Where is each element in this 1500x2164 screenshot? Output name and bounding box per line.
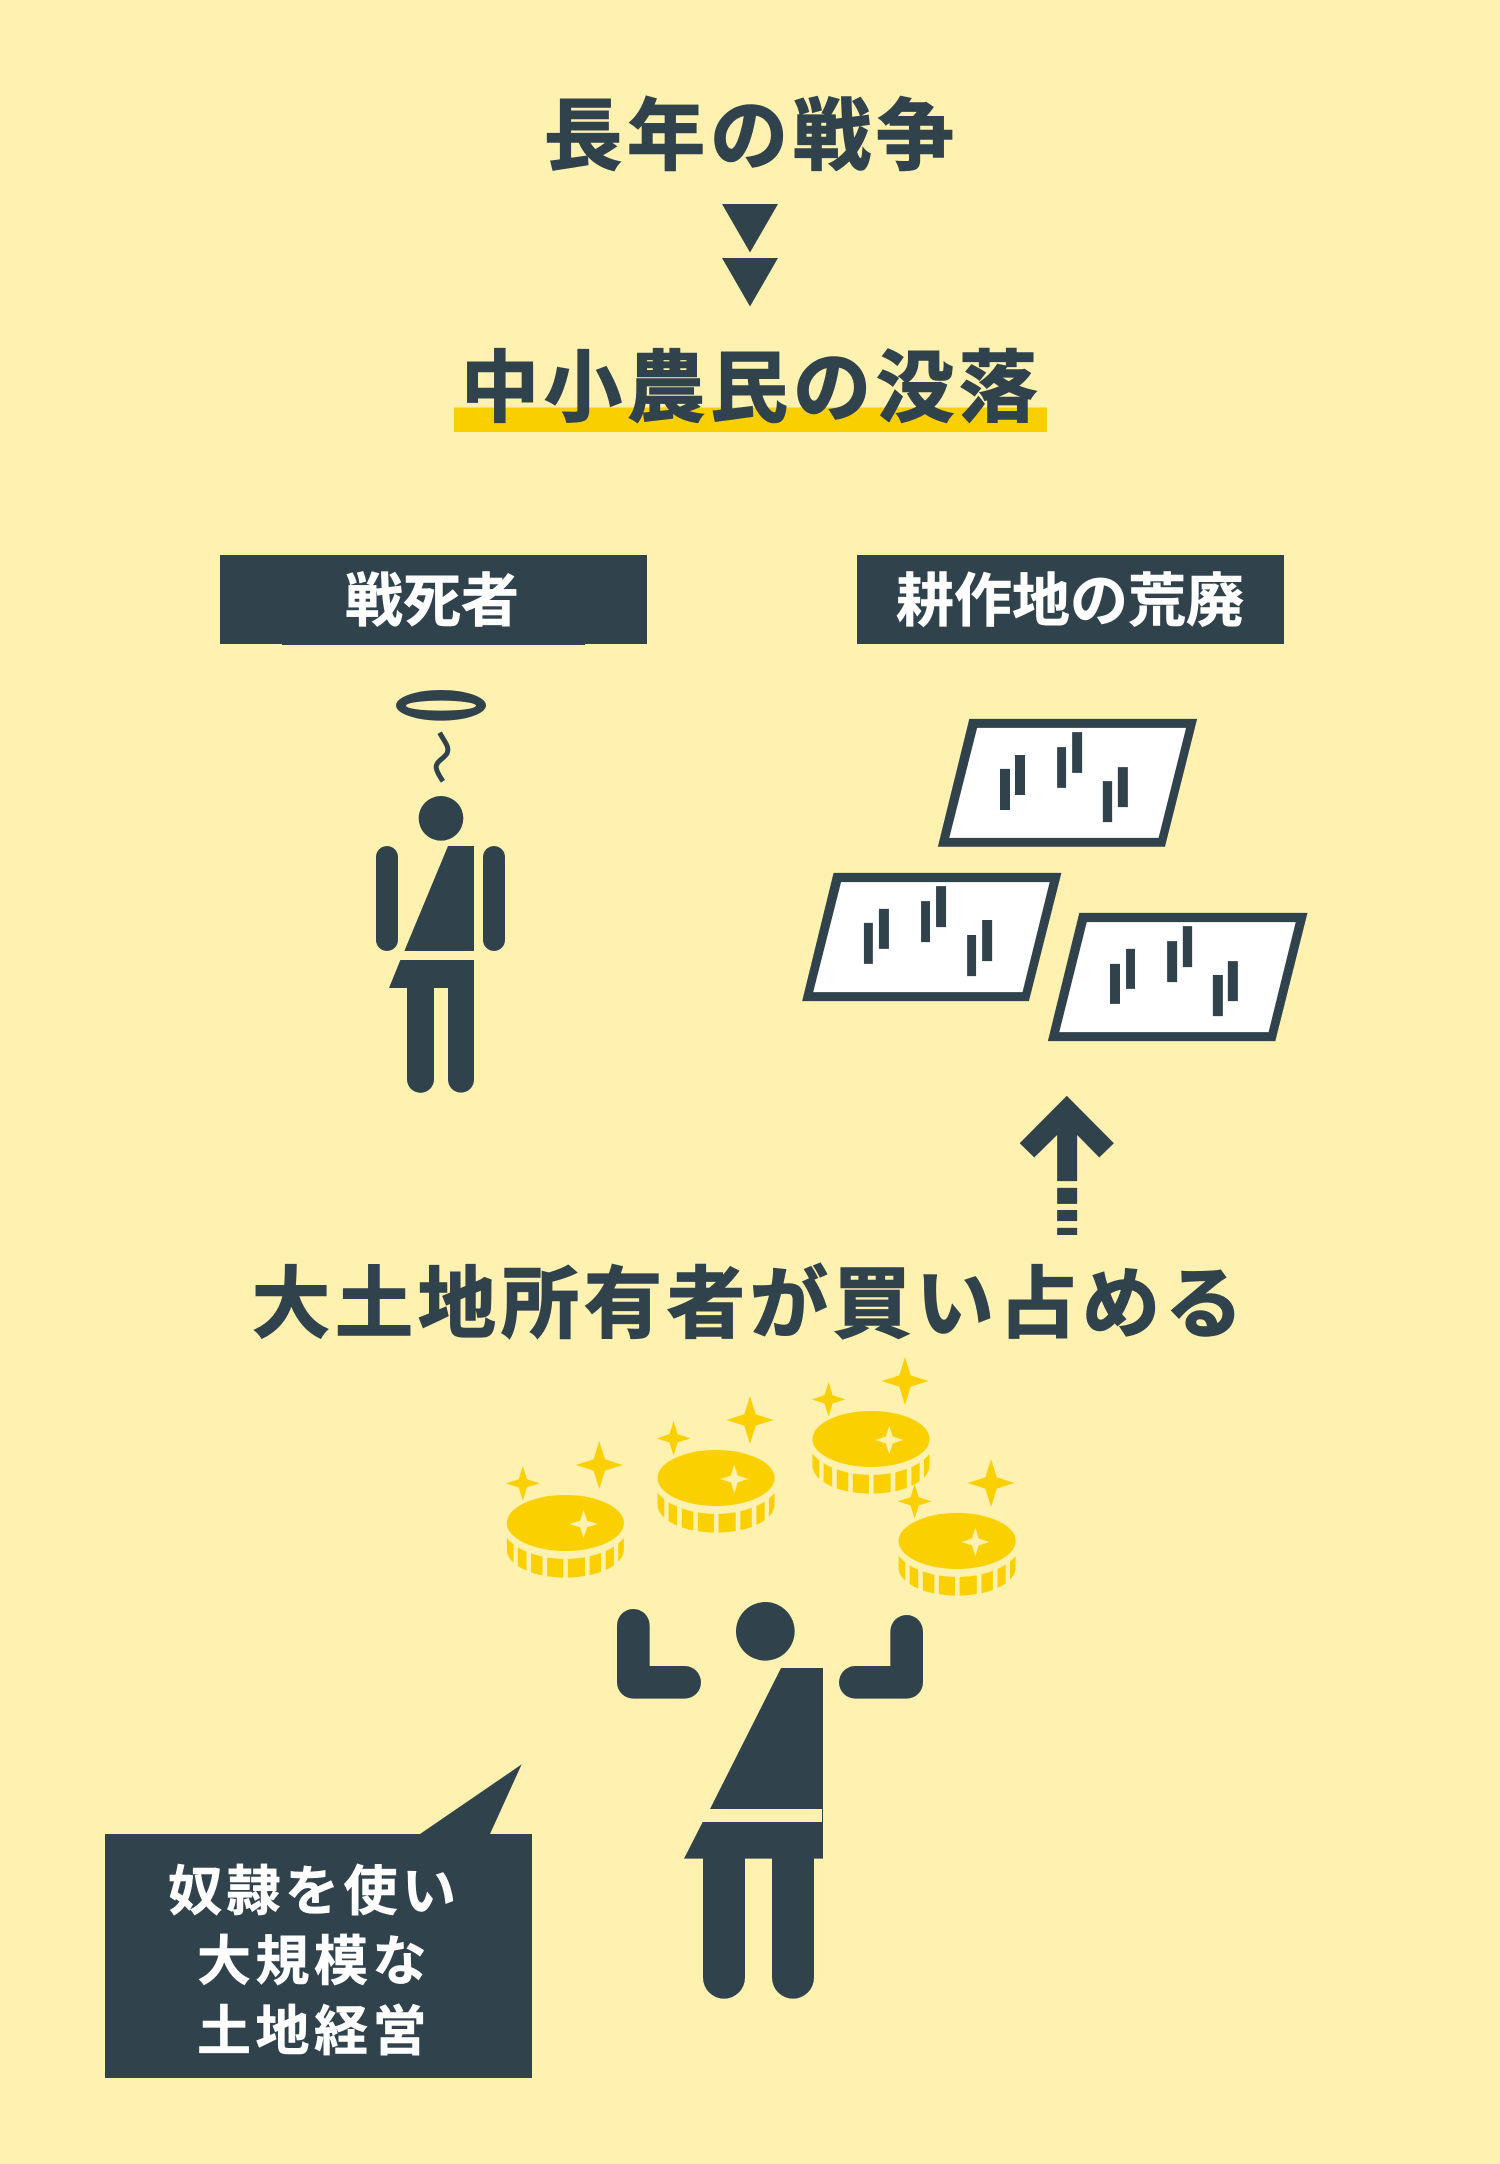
callout line 2: 大規模な	[197, 1932, 431, 1992]
coin 2	[657, 1396, 775, 1538]
arrow: dashed up arrow	[1020, 1096, 1114, 1235]
coin 3	[812, 1357, 930, 1499]
callout line 3: 土地経営	[197, 2002, 431, 2062]
callout line 1: 奴隷を使い	[168, 1862, 460, 1922]
coin 4	[898, 1459, 1016, 1601]
label: farmland devastation: 耕作地の荒廃	[896, 569, 1244, 634]
label: farmland devastation	[857, 555, 1284, 644]
icon: dead person with halo	[376, 690, 505, 1093]
arrow: double down triangles	[722, 204, 778, 306]
heading: decline of small farmers: 中小農民の没落	[461, 344, 1042, 432]
heading: large landowners buy up: 大土地所有者が買い占める	[252, 1260, 1248, 1348]
field: top	[938, 719, 1197, 847]
field: left	[802, 873, 1061, 1001]
icon: sparkling coins	[506, 1357, 1016, 1601]
label: war dead	[220, 555, 647, 645]
field: right	[1048, 913, 1307, 1041]
icon: rich person flexing arms	[633, 1602, 907, 1999]
icon: three abandoned fields	[802, 719, 1307, 1041]
coin 1	[506, 1441, 624, 1583]
infographic canvas	[105, 95, 1308, 2078]
heading: long years of war: 長年の戦争	[544, 92, 959, 180]
label: war dead: 戦死者	[345, 569, 519, 634]
callout: slave-run large-scale land management	[105, 1764, 532, 2078]
